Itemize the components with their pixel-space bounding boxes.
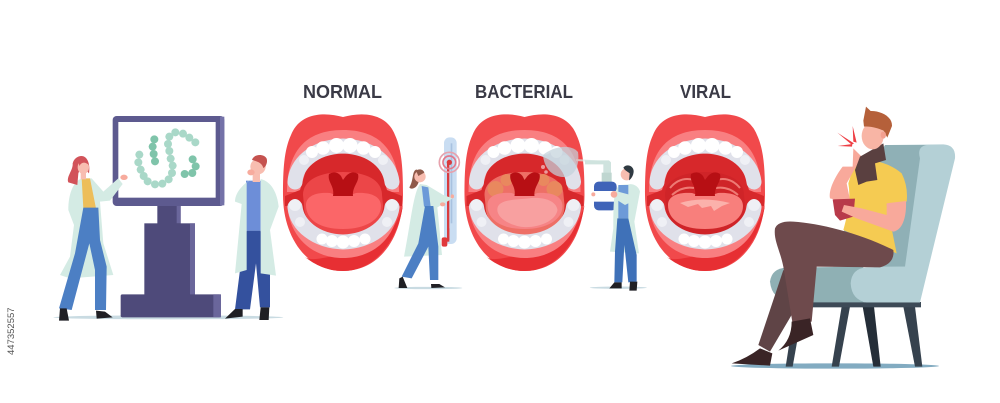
monitor with bacteria and two doctors bbox=[53, 116, 283, 321]
tongue coating bbox=[497, 198, 558, 227]
ground shadow bbox=[590, 286, 647, 289]
patient in armchair bbox=[731, 107, 955, 369]
armchair bbox=[770, 144, 955, 367]
ground shadow bbox=[53, 315, 283, 319]
thermometer and woman doctor bbox=[394, 137, 462, 289]
man bbox=[732, 107, 907, 366]
doctor with spray bottle bbox=[585, 160, 647, 291]
woman doctor bbox=[399, 169, 454, 288]
shirt bbox=[843, 158, 907, 253]
raised arm bbox=[830, 148, 862, 200]
spray cloud bbox=[541, 147, 606, 177]
reference number: 447352557 bbox=[6, 307, 17, 355]
heading: viral: VIRAL bbox=[680, 82, 731, 102]
monitor stand bbox=[121, 205, 221, 317]
mouth: bacterial bbox=[464, 114, 584, 271]
pain marks bbox=[837, 126, 857, 147]
mouth: normal bbox=[283, 114, 403, 271]
thermometer bbox=[439, 137, 459, 247]
doctor: woman in white coat bbox=[59, 156, 128, 321]
lower arm bbox=[842, 201, 906, 232]
heading: bacterial: BACTERIAL bbox=[475, 82, 573, 102]
back leg bbox=[758, 270, 808, 352]
doctor: man in white coat bbox=[225, 155, 279, 320]
heading: normal: NORMAL bbox=[303, 82, 382, 102]
infected tonsils bbox=[488, 174, 562, 197]
ground shadow bbox=[731, 363, 939, 369]
swollen tonsils bbox=[670, 179, 740, 195]
doctor bbox=[609, 165, 640, 291]
front leg bbox=[775, 222, 893, 324]
monitor screen bbox=[113, 116, 224, 206]
cup bbox=[833, 199, 855, 221]
mouth: viral bbox=[645, 114, 765, 271]
bacteria chain bbox=[134, 128, 200, 188]
ground shadow bbox=[394, 287, 462, 289]
spray bottle bbox=[585, 160, 617, 210]
scarf bbox=[855, 143, 886, 185]
tongue streaks bbox=[680, 200, 730, 211]
head bbox=[862, 123, 884, 149]
